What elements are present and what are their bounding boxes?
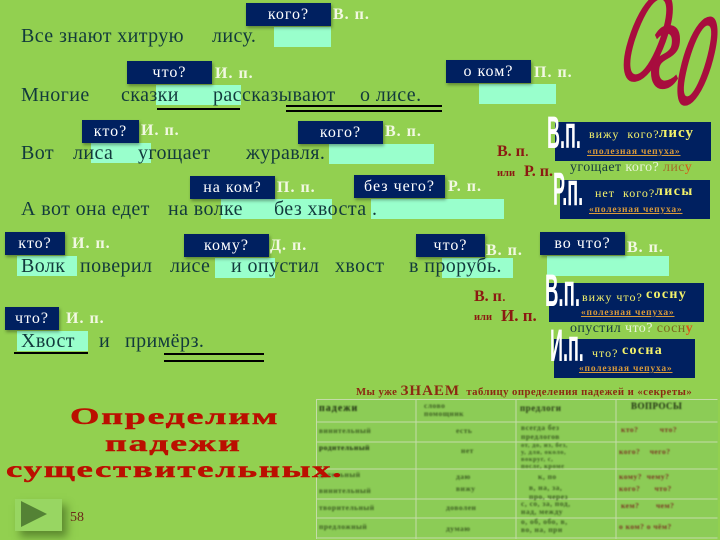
underlines <box>14 105 442 362</box>
question labels: о ком? <box>464 63 513 80</box>
case labels: В. п. <box>486 242 523 259</box>
sentence text: Многие <box>21 84 90 106</box>
sentence text: Хвост <box>21 330 75 352</box>
big case abbreviations: И.п. <box>550 322 584 372</box>
big case abbreviations: В.п. <box>547 109 581 158</box>
heading <box>6 403 343 482</box>
big case abbreviations: Р.п. <box>553 165 583 216</box>
case labels: В. п. <box>627 239 664 256</box>
heading: падежи <box>105 430 242 456</box>
table of cases: после, кроме <box>521 463 564 470</box>
panel: вижу кого лису <box>555 122 711 161</box>
case labels: И. п. <box>66 310 105 327</box>
question labels: кто? <box>94 123 127 140</box>
note: В. п. или И. п.: или <box>474 312 492 323</box>
question labels: что? <box>15 310 49 327</box>
case labels: В. п. <box>333 6 370 23</box>
table of cases: про, через <box>529 492 568 501</box>
note: В. п. или И. п. <box>474 288 537 325</box>
panel: нет кого лисы: лисы <box>655 184 694 199</box>
note: В. п. или Р. п. <box>497 143 553 180</box>
panel: нет кого лисы: нет кого? <box>595 186 655 200</box>
question labels: кого? <box>320 124 361 141</box>
case labels <box>66 6 664 327</box>
sentence text: на волке <box>168 198 243 220</box>
navigation button <box>15 499 62 531</box>
sentence text: А вот она едет <box>21 198 150 220</box>
sentence text: хвост <box>335 255 384 277</box>
panel: вижу кого лису: лису <box>659 125 694 141</box>
sentence text: Вот <box>21 142 54 164</box>
panel: что сосна <box>554 339 695 378</box>
table of cases: к, по <box>538 472 557 481</box>
panel: вижу кого лису: вижу кого? <box>589 127 660 141</box>
table of cases: в, на, за, <box>529 483 562 492</box>
sentence text: журавля. <box>246 142 325 164</box>
table of cases: кого? чего? <box>619 447 670 456</box>
panel: вижу что сосну: сосну <box>646 287 687 302</box>
question labels: во что? <box>554 235 611 252</box>
table of cases: творительный <box>319 503 375 512</box>
question labels: кто? <box>18 235 52 252</box>
table of cases: о, об, обо, в, <box>521 517 568 526</box>
heading: Определим <box>70 403 279 430</box>
case labels: Д. п. <box>270 237 307 254</box>
note: В. п. или Р. п.: Р. п. <box>524 163 553 180</box>
table of cases: предлогов <box>521 432 560 441</box>
question labels: что? <box>434 237 467 254</box>
case labels: В. п. <box>385 123 422 140</box>
panel: нет кого лисы <box>560 180 710 219</box>
table of cases: о ком? о чём? <box>619 522 672 531</box>
table of cases: родительный <box>319 443 370 452</box>
table of cases: кем? чем? <box>621 501 674 510</box>
panel: вижу что сосну: вижу что? <box>582 290 643 304</box>
sentence text: Волк <box>21 255 65 277</box>
table of cases: кто? что? <box>621 425 677 434</box>
table of cases: думаю <box>446 524 470 533</box>
note: В. п. или Р. п.: или <box>497 168 515 179</box>
sentence text: . <box>372 198 377 220</box>
case labels: И. п. <box>72 235 111 252</box>
question labels: что? <box>153 64 186 81</box>
sentence text: рассказывают <box>213 84 336 106</box>
table of cases: кого? что? <box>619 484 672 493</box>
sentence text: лису. <box>212 25 256 47</box>
question labels <box>4 3 628 334</box>
question labels: на ком? <box>203 179 262 196</box>
table of cases: вижу <box>456 484 476 493</box>
panel: что сосна: «полезная чепуха» <box>579 364 672 374</box>
exclamation: Ого <box>610 0 720 110</box>
panel: что сосна: сосна <box>622 343 663 358</box>
table of cases: от, до, из, без, <box>521 442 568 449</box>
table of cases: с, со, за, под, <box>521 499 570 508</box>
question labels: без чего? <box>364 178 435 195</box>
panel: вижу что сосну: «полезная чепуха» <box>581 308 674 318</box>
sentence text: и опустил <box>231 255 319 277</box>
table of cases: во, на, при <box>521 525 563 534</box>
table of cases: всегда без <box>521 423 559 432</box>
sentence text: и <box>99 330 110 352</box>
case labels: И. п. <box>141 122 180 139</box>
question labels: кого? <box>268 6 309 23</box>
table of cases: помощник <box>424 409 464 418</box>
table of cases: ВОПРОСЫ <box>631 401 682 411</box>
big case abbreviations <box>545 109 584 372</box>
question labels: кому? <box>204 237 249 254</box>
table title: Мы уже ЗНАЕМ таблицу определения падежей и «секреты» <box>356 383 692 399</box>
sentence text: лисе <box>170 255 210 277</box>
table of cases: нет <box>461 446 474 455</box>
big case abbreviations: В.п. <box>545 267 580 316</box>
table of cases: слово <box>424 401 445 410</box>
table of cases: над, между <box>521 507 563 516</box>
table of cases: у, для, около, <box>521 449 566 456</box>
table of cases <box>316 399 718 539</box>
note: В. п. или Р. п.: В. п. <box>497 143 529 160</box>
page number: 58 <box>70 510 84 525</box>
sentence text: о лисе. <box>360 84 421 106</box>
sentence text: лиса <box>73 142 113 164</box>
note: В. п. или И. п.: И. п. <box>501 306 537 325</box>
table of cases: дательный <box>319 470 361 479</box>
grid <box>316 399 718 539</box>
sentence text <box>21 25 502 352</box>
sentence text: поверил <box>80 255 152 277</box>
table of cases: есть <box>456 426 472 435</box>
heading: существительных. <box>6 456 343 482</box>
table of cases: доволен <box>446 503 476 512</box>
sentence text: сказки <box>121 84 179 106</box>
table of cases: винительный <box>319 486 371 495</box>
table of cases: даю <box>456 472 471 481</box>
panel: что сосна: что? <box>592 346 618 360</box>
case labels: Р. п. <box>448 178 482 195</box>
sentence text: примёрз. <box>125 330 204 352</box>
table of cases: падежи <box>319 403 358 414</box>
table of cases: вокруг, с, <box>521 456 553 463</box>
case labels: П. п. <box>534 64 573 81</box>
case labels: И. п. <box>215 65 254 82</box>
line: опустил что сосну: опустил что? сосну <box>570 321 693 336</box>
panel: нет кого лисы: «полезная чепуха» <box>589 205 682 215</box>
table of cases: предлоги <box>520 403 561 413</box>
panel: вижу кого лису: «полезная чепуха» <box>587 147 680 157</box>
sentence text: Все знают хитрую <box>21 25 184 47</box>
table of cases: винительный <box>319 426 371 435</box>
panel: вижу что сосну <box>549 283 704 322</box>
case labels: П. п. <box>277 179 316 196</box>
sentence text: в прорубь. <box>409 255 502 277</box>
note: В. п. или И. п.: В. п. <box>474 288 506 305</box>
table of cases: кому? чему? <box>619 472 669 481</box>
line: угощает кого лису: угощает кого? лису <box>570 160 692 175</box>
table of cases: предложный <box>319 522 367 531</box>
sentence text: угощает <box>138 142 210 164</box>
sentence text: без хвоста <box>274 198 366 220</box>
